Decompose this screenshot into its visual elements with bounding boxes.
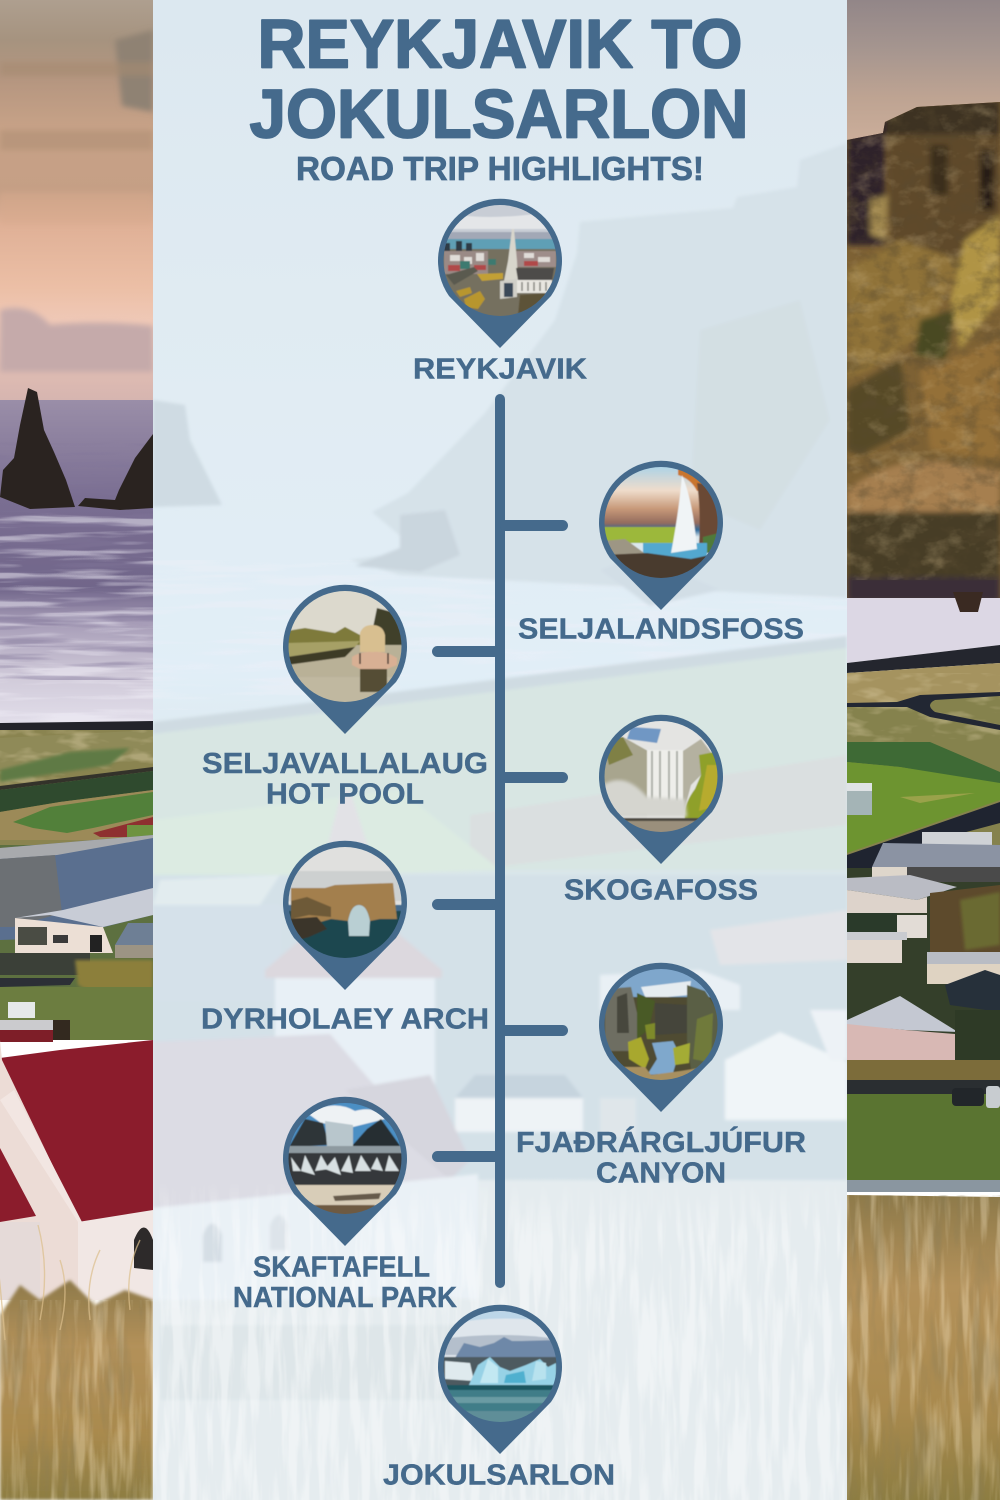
- pin: Reykjavik: [438, 199, 562, 348]
- ghost: beach band: [153, 636, 847, 734]
- ghost: church: [332, 792, 364, 844]
- ghost: cliff: [350, 143, 847, 598]
- pin: Jokulsarlon: [438, 1305, 562, 1454]
- label: Skogafoss: SKOGAFOSS: [564, 874, 758, 906]
- label: Dyrholaey arch: DYRHOLAEY ARCH: [201, 1004, 489, 1036]
- label: Fjadrargljufur canyon: CANYON: [596, 1158, 726, 1190]
- sea stacks: [0, 388, 153, 510]
- pin: Dyrholaey arch: [283, 841, 407, 990]
- label: Reykjavik: REYKJAVIK: [413, 354, 587, 386]
- title: JOKULSARLON: [250, 76, 748, 152]
- right photo strip: [847, 0, 1000, 1500]
- ghost: fields: [154, 648, 847, 812]
- label: Skaftafell National Park: [233, 1252, 457, 1314]
- pin: Skaftafell: [283, 1097, 407, 1246]
- pin: Skogafoss: [599, 715, 723, 864]
- pin: Seljavallalaug hot pool: [283, 585, 407, 734]
- label: Fjadrargljufur canyon: [516, 1125, 806, 1190]
- ghost: grass: [153, 1180, 847, 1500]
- red church roof: [0, 1040, 153, 1222]
- translucent centre panel: [153, 0, 847, 1500]
- ghost: town: [153, 875, 847, 1180]
- sports hall: [0, 835, 153, 940]
- pin: Fjadrargljufur canyon: [599, 963, 723, 1112]
- label: Jokulsarlon: JOKULSARLON: [383, 1460, 615, 1492]
- label: Seljavallalaug hot pool: [202, 748, 488, 810]
- pin: Seljalandsfoss: [599, 461, 723, 610]
- title: REYKJAVIK TO: [258, 6, 742, 82]
- label: Skaftafell National Park: SKAFTAFELL: [253, 1252, 430, 1284]
- label: Fjadrargljufur canyon: FJAÐRÁRGLJÚFUR: [516, 1125, 806, 1159]
- cliff: [847, 100, 1000, 602]
- subtitle: ROAD TRIP HIGHLIGHTS!: [296, 150, 704, 187]
- timeline: [432, 394, 568, 1288]
- label: Seljalandsfoss: SELJALANDSFOSS: [518, 614, 804, 646]
- ghost: sea stack: [153, 400, 222, 507]
- left photo strip: [0, 0, 153, 1500]
- label: Seljavallalaug hot pool: SELJAVALLALAUG: [202, 748, 488, 780]
- title: [250, 6, 748, 152]
- label: Seljavallalaug hot pool: HOT POOL: [266, 778, 424, 810]
- label: Skaftafell National Park: NATIONAL PARK: [233, 1282, 457, 1314]
